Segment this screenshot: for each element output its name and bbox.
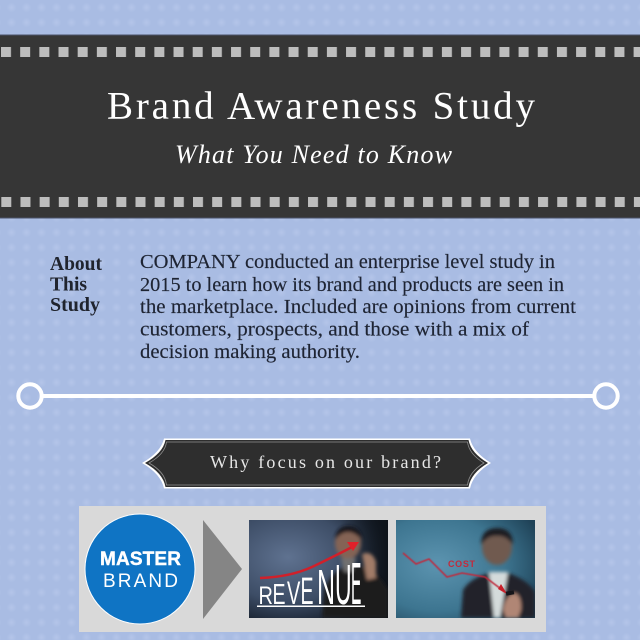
revenue word: E [351, 552, 361, 618]
about heading: This [50, 274, 87, 296]
about body text: decision making authority. [140, 341, 360, 363]
about heading: Study [50, 295, 100, 316]
film strip holes: bottom [0, 197, 640, 207]
red rising line [260, 546, 354, 578]
subtitle: What You Need to Know [175, 140, 453, 169]
photo: revenue [249, 520, 388, 618]
cost word: COST [448, 559, 476, 569]
revenue word: V [287, 575, 300, 611]
header band [0, 34, 640, 218]
revenue word: N [317, 561, 335, 615]
banner [142, 438, 491, 488]
revenue word: U [335, 554, 352, 617]
revenue word: R [258, 582, 273, 609]
about body text [140, 251, 576, 363]
about body text: COMPANY conducted an enterprise level study in [140, 251, 555, 273]
master brand logo: BRAND [103, 571, 178, 592]
about body text: customers, prospects, and those with a mix of [140, 318, 529, 340]
photo: cost [396, 520, 535, 618]
banner text: Why focus on our brand? [210, 452, 441, 472]
film strip holes: top [0, 47, 640, 57]
about heading [50, 254, 102, 316]
master brand logo: MASTER [100, 549, 181, 570]
about heading: About [50, 254, 102, 275]
arrow [203, 520, 242, 619]
title: Brand Awareness Study [107, 84, 536, 128]
revenue word [260, 563, 361, 604]
red falling line [403, 553, 505, 592]
about body text: the marketplace. Included are opinions from current [140, 296, 576, 318]
about body text: 2015 to learn how its brand and products are seen in [140, 274, 564, 296]
revenue word: E [300, 571, 314, 613]
revenue word: E [272, 579, 286, 611]
master brand logo [84, 514, 196, 624]
divider with end circles [18, 384, 618, 408]
image panel [79, 506, 546, 632]
